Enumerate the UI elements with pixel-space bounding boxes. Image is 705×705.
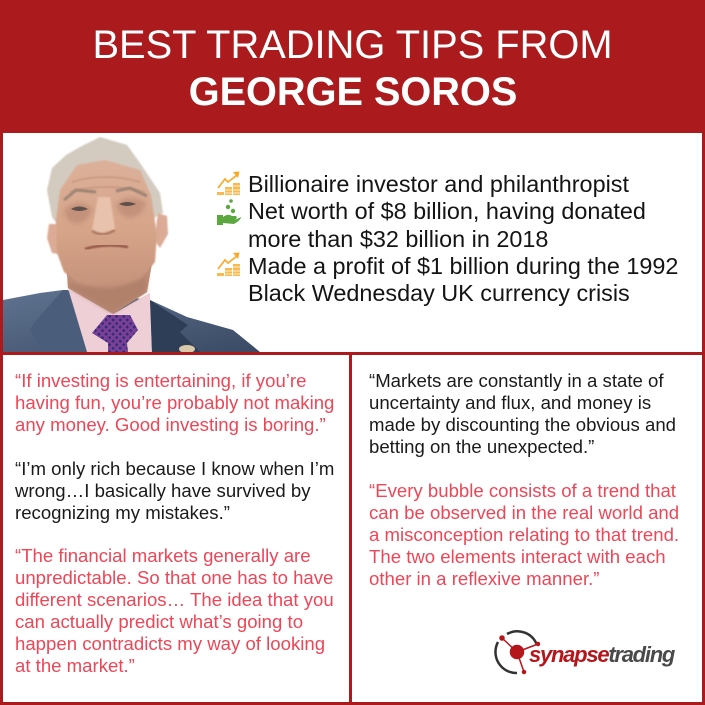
portrait of George Soros bbox=[3, 137, 260, 353]
title line 2: GEORGE SOROS bbox=[189, 70, 517, 114]
face bbox=[56, 160, 157, 290]
quote 5: other in a reflexive manner.” bbox=[369, 568, 599, 589]
quote 4: uncertainty and flux, and money is bbox=[369, 392, 651, 413]
hair bbox=[47, 137, 163, 228]
quote 3: different scenarios… The idea that you bbox=[15, 589, 334, 610]
quote 2: wrong…I basically have survived by bbox=[14, 480, 311, 501]
panel: left quotes bbox=[14, 370, 334, 676]
bullet text: billionaire: Billionaire investor and philanthropist bbox=[248, 171, 629, 197]
logo wordmark: synapsetrading bbox=[529, 642, 676, 667]
lapel pin bbox=[179, 345, 195, 352]
quote 5: “Every bubble consists of a trend that bbox=[369, 480, 677, 501]
quote 5: a misconception relating to that trend. bbox=[369, 524, 679, 545]
lapels bbox=[30, 290, 86, 352]
eyebrows bbox=[64, 188, 147, 200]
quote 5: can be observed in the real world and bbox=[369, 502, 679, 523]
quote 3: unpredictable. So that one has to have bbox=[15, 567, 333, 588]
tie bbox=[92, 315, 138, 352]
nose shadow bbox=[92, 230, 115, 234]
quote 3 bbox=[15, 545, 334, 676]
chin shadow bbox=[68, 276, 147, 313]
forehead wrinkles bbox=[70, 177, 145, 192]
quote 1: any money. Good investing is boring.” bbox=[15, 414, 326, 435]
header banner bbox=[0, 0, 705, 133]
bullet text: black wednesday: Black Wednesday UK currency crisis bbox=[248, 280, 630, 306]
shirt bbox=[68, 288, 152, 352]
quote 1 bbox=[15, 370, 334, 435]
eye sockets bbox=[64, 197, 146, 224]
bullet text: net worth: Net worth of $8 billion, having donated bbox=[248, 198, 646, 224]
quote 2 bbox=[14, 458, 334, 523]
icon: money hand bbox=[217, 199, 241, 225]
bullet list bbox=[217, 171, 678, 306]
quote 5: The two elements interact with each bbox=[369, 546, 666, 567]
icon: rising coins bbox=[217, 172, 240, 195]
ears bbox=[47, 213, 168, 254]
logo node bbox=[500, 636, 540, 674]
quote 4: made by discounting the obvious and bbox=[369, 414, 676, 435]
logo: Synapse Trading bbox=[495, 631, 676, 674]
quote 1: having fun, you’re probably not making bbox=[15, 392, 334, 413]
quote 4: betting on the unexpected.” bbox=[369, 436, 594, 457]
neck bbox=[66, 264, 152, 314]
nose bbox=[92, 197, 115, 233]
quote 4 bbox=[369, 370, 676, 457]
icon: rising coins bbox=[217, 252, 240, 276]
bullet text: profit: Made a profit of $1 billion during the 1992 bbox=[248, 253, 678, 279]
mouth bbox=[85, 245, 128, 249]
quote 3: at the market.” bbox=[15, 655, 135, 676]
quote 3: “The financial markets generally are bbox=[15, 545, 311, 566]
quote 2: “I’m only rich because I know when I’m bbox=[15, 458, 334, 479]
quote 3: happen contradicts my way of looking bbox=[15, 633, 325, 654]
bullet text: donation continuation: more than $32 billion in 2018 bbox=[248, 226, 548, 252]
quote 5 bbox=[369, 480, 679, 589]
quote 4: “Markets are constantly in a state of bbox=[369, 370, 664, 391]
title line 1: BEST TRADING TIPS FROM bbox=[92, 23, 613, 67]
panel: right quotes bbox=[369, 370, 679, 589]
eyes bbox=[71, 202, 136, 211]
suit bbox=[3, 290, 260, 352]
quote 1: “If investing is entertaining, if you’re bbox=[15, 370, 306, 391]
logo arc bbox=[495, 631, 537, 673]
quote 2: recognizing my mistakes.” bbox=[15, 502, 230, 523]
quote 3: can actually predict what’s going to bbox=[15, 611, 303, 632]
